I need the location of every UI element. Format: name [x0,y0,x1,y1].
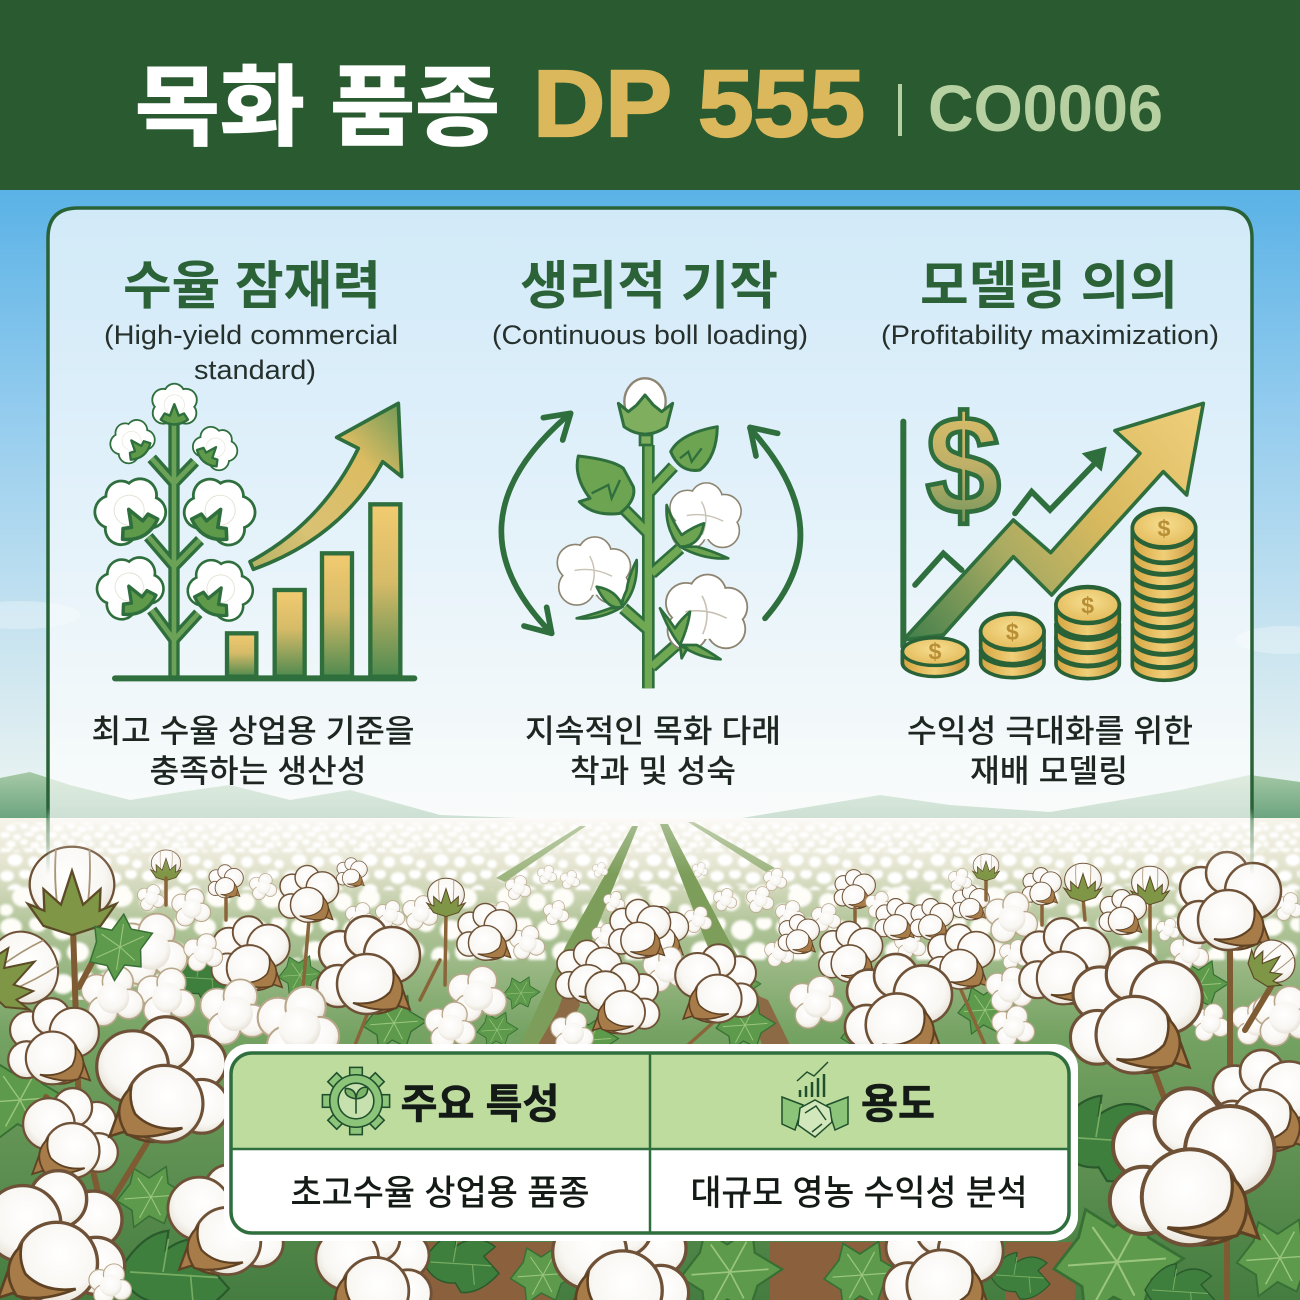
main translucent panel [48,208,1252,875]
subtitle line 2: standard) [194,355,316,385]
table header band [231,1053,1069,1149]
description line 2: 재배 모델링 [970,753,1128,789]
description: mechanism: 지속적인 목화 다래 [525,713,781,749]
title: DP 555: DP 555 [533,51,865,157]
heading: modelling: 모델링 의의 [920,258,1178,316]
column: modelling significance [881,258,1219,789]
far field cotton rows [0,822,1300,1000]
icon: dollar, growth arrow and coins: $ [926,386,1001,543]
distant hills [0,772,1300,840]
icon: handshake with chart [782,1062,848,1137]
icon: gear with sprout [322,1067,390,1135]
icon: dollar, growth arrow and coins [902,386,1203,680]
description line 2: 착과 및 성숙 [570,753,736,789]
description line 2: 충족하는 생산성 [150,753,366,789]
subtitle: mechanism: (Continuous boll loading) [492,320,808,350]
cotton field illustration [0,818,1300,1300]
icon: cotton branch with cycle arrows [501,378,800,688]
title: cotton variety: 목화 품종 [135,58,500,157]
heading: mechanism: 생리적 기작 [520,258,778,316]
mid-field bolls [81,854,1300,1065]
description: modelling: 수익성 극대화를 위한 [907,713,1193,749]
icon: dollar, growth arrow and coins: $ [1006,619,1019,645]
cell: large farm profitability analysis: 대규모 영농 수익성 분석 [690,1174,1028,1213]
distant bolls [138,850,1300,971]
table outer white frame [224,1044,1078,1241]
summary table [224,1044,1078,1241]
icon: dollar, growth arrow and coins: $ [929,638,942,664]
header: key traits: 주요 특성 [400,1081,560,1127]
leaves [0,954,1300,1300]
icon: dollar, growth arrow and coins: $ [1158,516,1171,542]
mid-field stems [166,878,1150,1045]
cell: top-yield commercial variety: 초고수율 상업용 품종 [290,1174,590,1213]
code CO0006: CO0006 [928,71,1163,145]
clouds [0,601,1300,654]
icon: dollar, growth arrow and coins: $ [1081,592,1094,618]
column: yield potential [87,258,414,789]
description: yield: 최고 수율 상업용 기준을 [92,713,414,749]
separator [898,84,902,136]
heading: yield potential: 수율 잠재력 [123,258,381,316]
column: physiological mechanism [492,258,808,789]
icon: cotton plant and rising bars [87,385,414,678]
subtitle: modelling: (Profitability maximization) [881,320,1219,350]
soil and furrows [410,822,1075,1300]
header: usage: 용도 [861,1081,935,1127]
header band [0,0,1300,190]
foreground bolls [0,847,1300,1300]
foreground stems [35,927,1272,1300]
subtitle: yield: (High-yield commercial [104,320,398,350]
sky background [0,190,1300,850]
table border and dividers [231,1053,1069,1233]
